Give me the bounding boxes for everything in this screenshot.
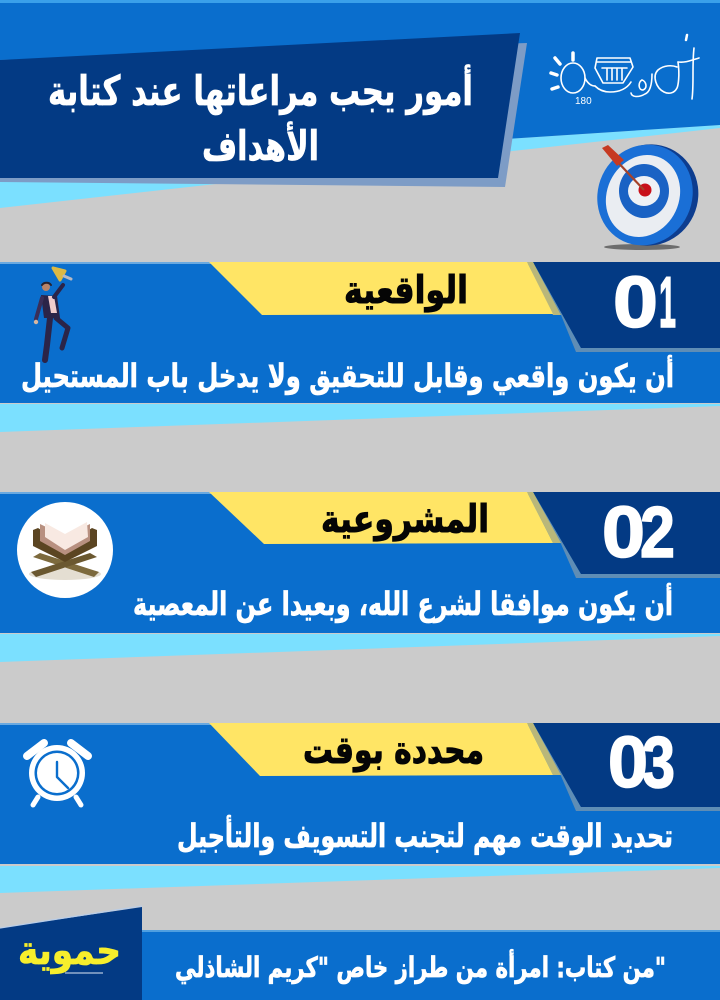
number 02 xyxy=(602,493,675,573)
logo: Osbouha 180: 180 xyxy=(575,96,592,107)
icon: businessman holding trophy xyxy=(34,268,71,360)
number 01: 0 xyxy=(613,263,658,343)
icon: alarm clock xyxy=(27,743,88,805)
panel: legitimacy xyxy=(0,492,720,662)
title: الأهداف xyxy=(202,120,319,170)
logo: Osbouha 180 xyxy=(551,35,699,107)
number 03: 3 xyxy=(642,723,675,803)
icon: target with arrow xyxy=(581,128,715,262)
panel: realism: 1 xyxy=(659,263,676,343)
number 03 xyxy=(608,723,675,803)
title xyxy=(48,64,473,170)
number 03: 0 xyxy=(608,723,648,803)
publisher logo panel xyxy=(0,906,142,1000)
number 01 xyxy=(613,263,676,343)
number 02: 0 xyxy=(602,493,645,573)
publisher logo panel: حموية xyxy=(18,928,121,974)
heading: المشروعية xyxy=(321,497,489,542)
number 02: 2 xyxy=(640,493,675,573)
panel: source footer xyxy=(0,906,720,1000)
heading: محددة بوقت xyxy=(303,728,484,772)
panel: time bound xyxy=(0,723,720,893)
panel: realism xyxy=(0,262,720,432)
icon: Quran on wooden stand xyxy=(17,502,113,598)
title: أمور يجب مراعاتها عند كتابة xyxy=(48,64,473,115)
header panel xyxy=(0,0,720,262)
heading: الواقعية xyxy=(344,268,468,312)
